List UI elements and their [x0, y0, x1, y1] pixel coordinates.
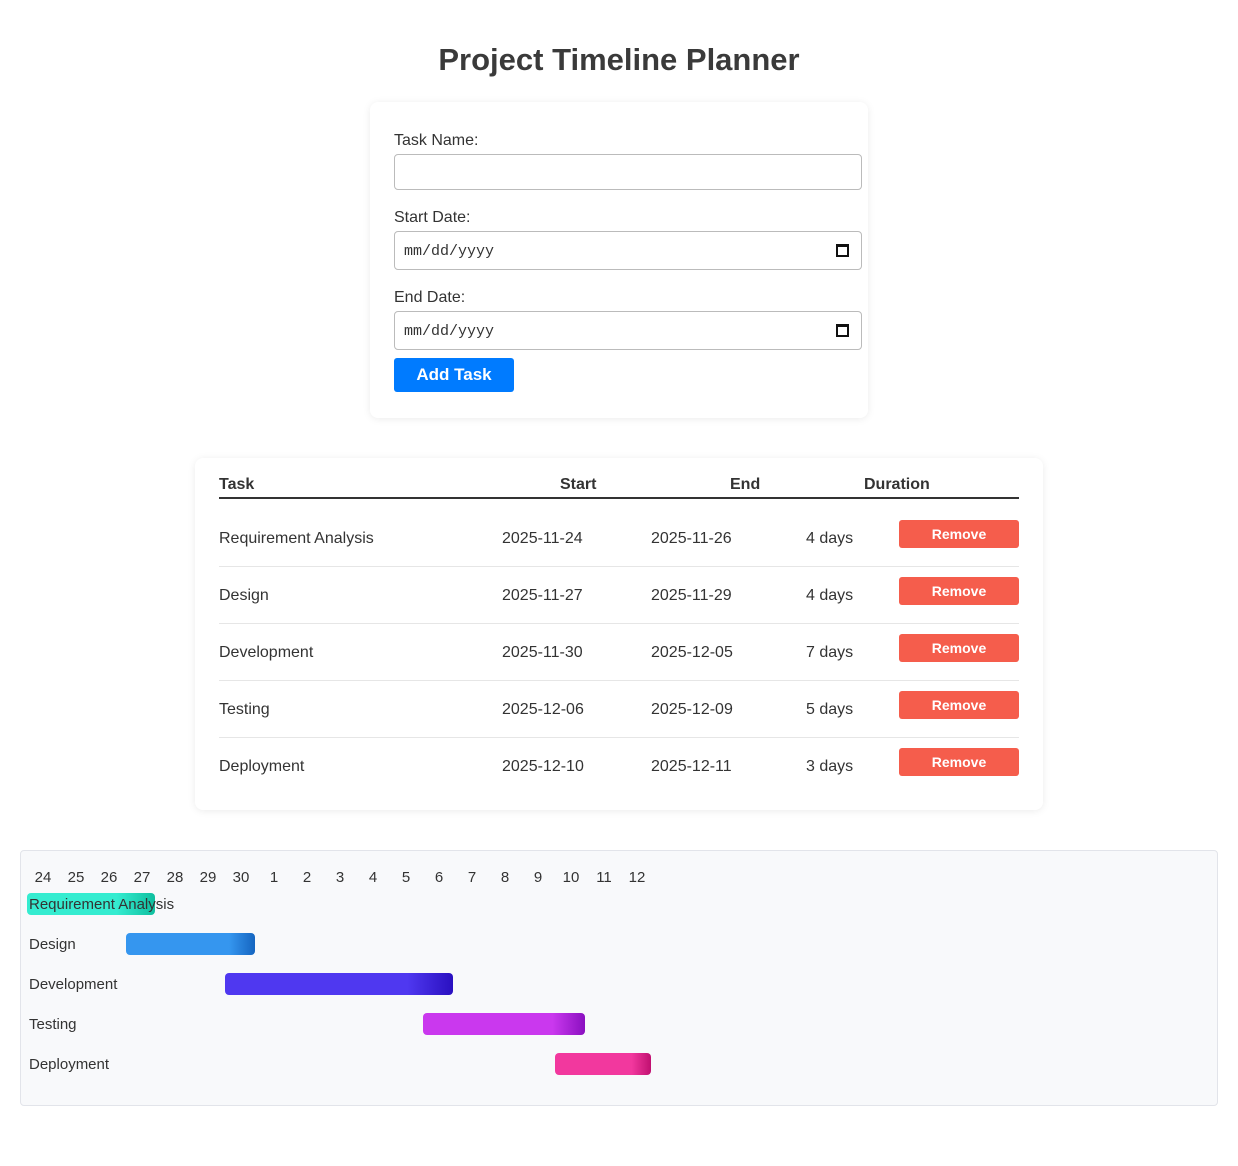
row: Design: 2025-11-27: [502, 587, 583, 604]
row: Requirement Analysis: [219, 520, 1019, 548]
input: start date: [394, 231, 862, 270]
gantt day axis: 30: [233, 869, 249, 886]
row: Deployment: 2025-12-10: [502, 758, 584, 775]
panel: task table: [195, 458, 1043, 810]
gantt day axis: [35, 869, 645, 886]
row: Development: 7 days: [806, 644, 853, 661]
gantt label: Requirement Analysis: Requirement Analysis: [29, 896, 174, 913]
table header: End: [730, 476, 760, 493]
gantt day axis: 11: [596, 869, 612, 886]
row: Testing: Remove: [932, 697, 986, 713]
gantt day axis: 5: [402, 869, 410, 886]
gantt day axis: 12: [629, 869, 645, 886]
input: end date: mm/dd/yyyy: [404, 323, 494, 340]
row: Requirement Analysis: Remove: [932, 526, 986, 542]
gantt day axis: 7: [468, 869, 476, 886]
row: Deployment: 3 days: [806, 758, 853, 775]
gantt day axis: 1: [270, 869, 278, 886]
row: Testing: 5 days: [806, 701, 853, 718]
gantt day axis: 25: [68, 869, 84, 886]
row: Design: 4 days: [806, 587, 853, 604]
panel: gantt chart: [20, 850, 1218, 1106]
row: Development: [219, 634, 1019, 662]
gantt bar: Deployment: [555, 1053, 651, 1075]
row: Deployment: Deployment: [219, 758, 304, 775]
row: Requirement Analysis: 2025-11-26: [651, 530, 732, 547]
row: Development: Remove: [932, 640, 986, 656]
row: Requirement Analysis: Requirement Analysis: [219, 530, 374, 547]
gantt bar: Requirement Analysis: [27, 893, 155, 915]
row: Development: Development: [219, 644, 313, 661]
row: Design: [219, 577, 1019, 605]
input: task name: [394, 154, 862, 190]
gantt label: Development: Development: [29, 976, 117, 993]
gantt label: Deployment: Deployment: [29, 1056, 109, 1073]
row: Deployment: 2025-12-11: [651, 758, 732, 775]
title: Project Timeline Planner: [438, 42, 800, 77]
table header: Duration: [864, 476, 930, 493]
row: Design: Remove: [932, 583, 986, 599]
gantt label: Design: Design: [29, 936, 76, 953]
gantt bar: Development: [225, 973, 453, 995]
button: add task: [394, 358, 514, 392]
input: end date: [394, 311, 862, 350]
row: Requirement Analysis: 4 days: [806, 530, 853, 547]
label: task name: Task Name:: [394, 132, 478, 149]
row: Testing: 2025-12-09: [651, 701, 733, 718]
row: Testing: Testing: [219, 701, 270, 718]
row: Deployment: [219, 748, 1019, 776]
gantt day axis: 29: [200, 869, 216, 886]
gantt day axis: 8: [501, 869, 509, 886]
row: Testing: [219, 691, 1019, 719]
table header: Start: [560, 476, 596, 493]
row: Deployment: Remove: [932, 754, 986, 770]
label: start date: Start Date:: [394, 209, 470, 226]
table header: [219, 476, 1019, 499]
gantt day axis: 4: [369, 869, 377, 886]
gantt day axis: 3: [336, 869, 344, 886]
gantt bar: Design: [126, 933, 255, 955]
gantt day axis: 24: [35, 869, 51, 886]
input: start date: mm/dd/yyyy: [404, 243, 494, 260]
gantt day axis: 10: [563, 869, 579, 886]
panel: task form: [370, 102, 868, 418]
row: Development: 2025-12-05: [651, 644, 733, 661]
row: Development: 2025-11-30: [502, 644, 583, 661]
row: Requirement Analysis: 2025-11-24: [502, 530, 583, 547]
row: Design: Design: [219, 587, 269, 604]
gantt day axis: 2: [303, 869, 311, 886]
gantt day axis: 27: [134, 869, 150, 886]
table header: Task: [219, 476, 254, 493]
button: add task: Add Task: [416, 365, 492, 384]
gantt day axis: 9: [534, 869, 542, 886]
label: end date: End Date:: [394, 289, 465, 306]
gantt day axis: 26: [101, 869, 117, 886]
row: Design: 2025-11-29: [651, 587, 732, 604]
gantt day axis: 28: [167, 869, 183, 886]
gantt label: Testing: Testing: [29, 1016, 77, 1033]
gantt day axis: 6: [435, 869, 443, 886]
row: Testing: 2025-12-06: [502, 701, 584, 718]
gantt bar: Testing: [423, 1013, 585, 1035]
